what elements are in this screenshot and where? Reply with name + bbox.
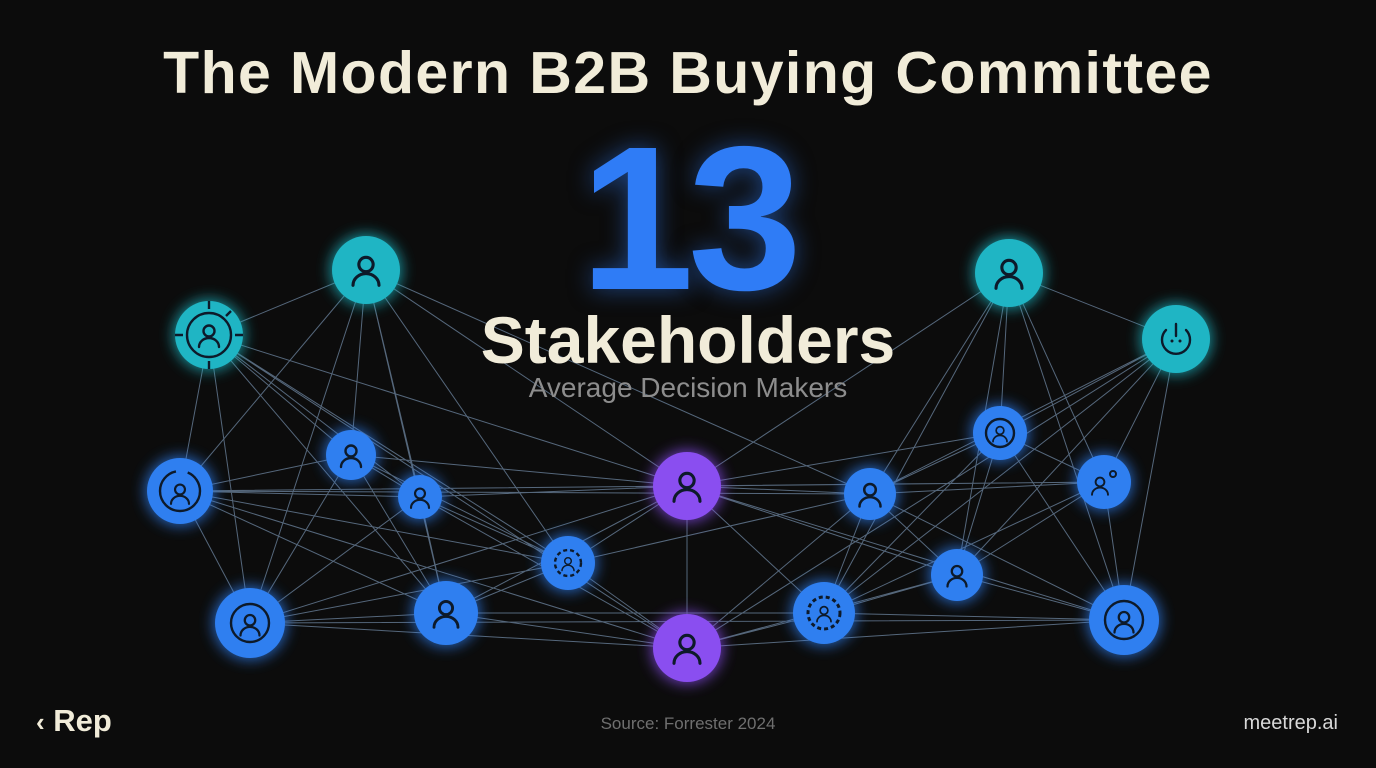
logo: ‹ Rep [36, 703, 112, 738]
source: Source: Forrester 2024 [601, 714, 775, 733]
node: teal power [1142, 305, 1210, 373]
node: teal top left [332, 236, 400, 304]
big number: 13 [580, 104, 796, 333]
glows [145, 234, 1212, 684]
title: The Modern B2B Buying Committee [163, 40, 1213, 106]
node: teal top right [975, 239, 1043, 307]
stakeholders label: Stakeholders [481, 303, 895, 377]
url: meetrep.ai [1244, 712, 1338, 734]
subtitle: Average Decision Makers [529, 372, 847, 403]
blue nodes [147, 406, 1159, 658]
node: teal segmented [175, 301, 243, 369]
purple nodes [653, 452, 721, 682]
